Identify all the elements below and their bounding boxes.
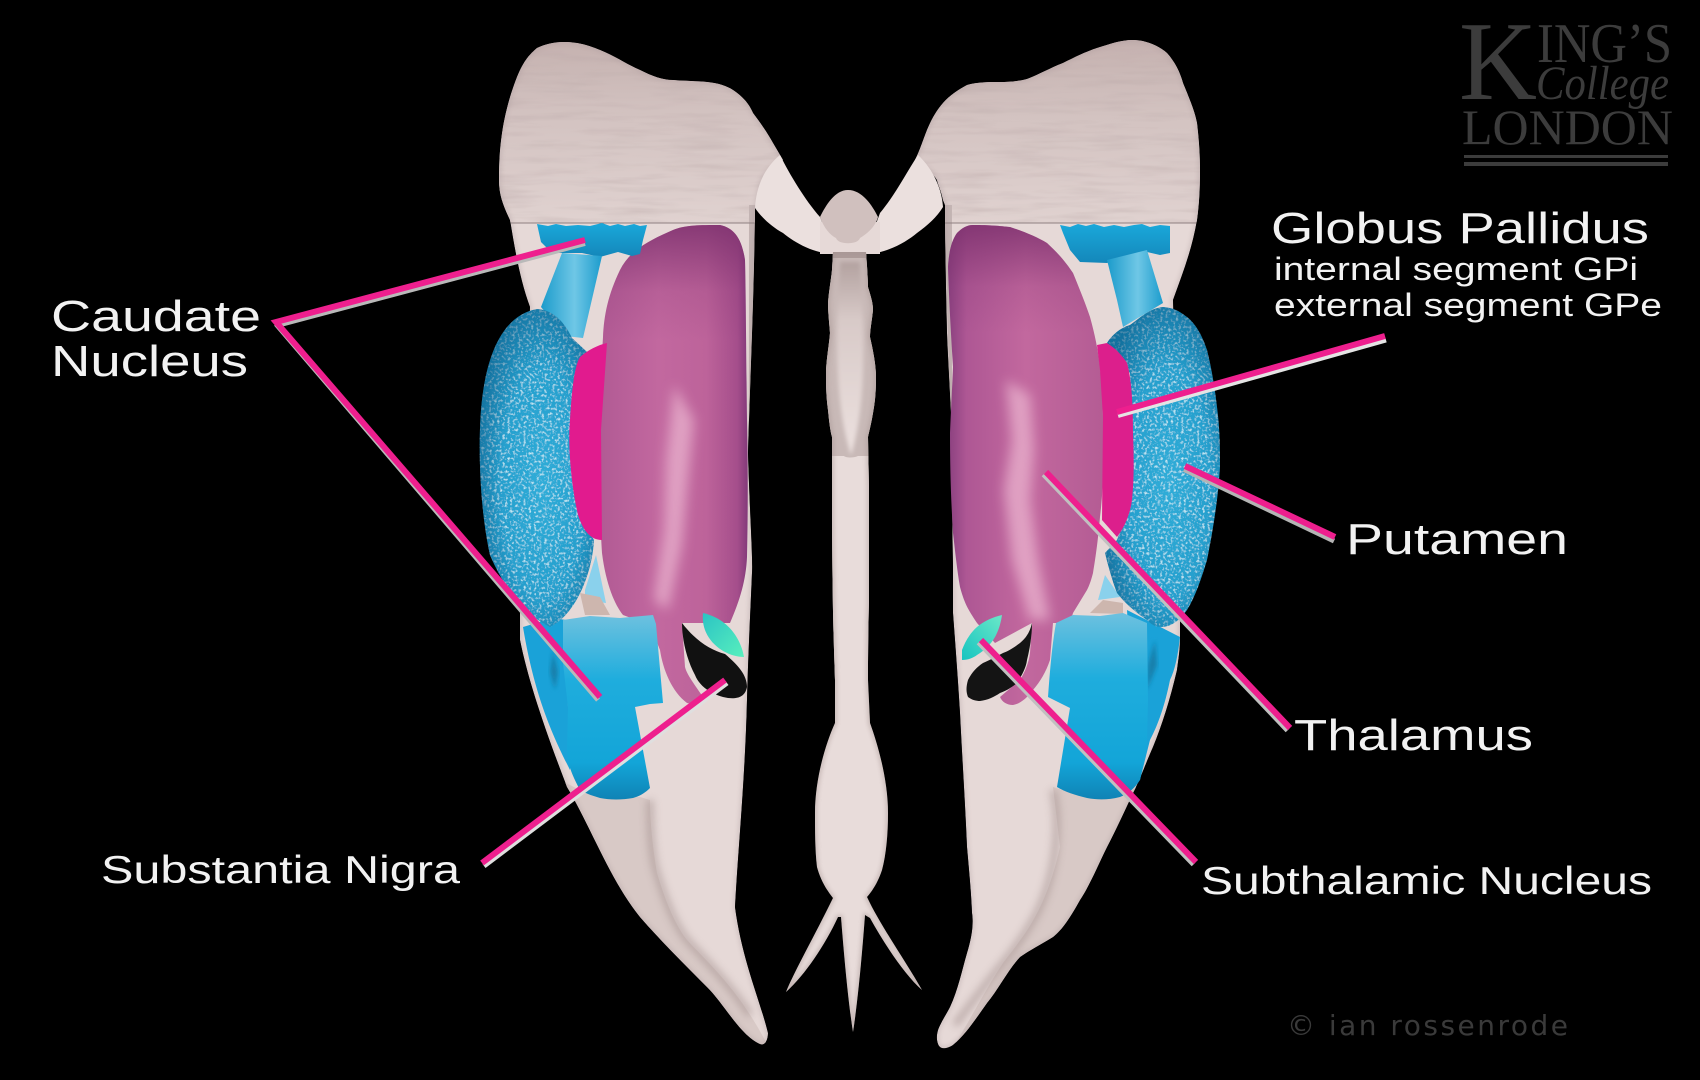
right caudate head — [1060, 224, 1170, 327]
left wing — [755, 155, 835, 254]
line: substantia nigra — [482, 680, 727, 866]
line: putamen — [1184, 466, 1335, 541]
right hemisphere — [910, 30, 1220, 1060]
right brown fold — [1090, 600, 1123, 614]
line: globus pallidus — [1117, 336, 1386, 416]
left hemisphere — [480, 30, 790, 1050]
wing junction — [820, 222, 880, 254]
label: caudate nucleus: Nucleus — [51, 337, 248, 386]
label: putamen: Putamen — [1346, 515, 1568, 564]
right subthalamic nucleus — [962, 615, 1002, 660]
right light blue sliver — [1098, 575, 1120, 600]
left caudate head — [537, 223, 647, 338]
top knob — [820, 190, 878, 243]
right wing — [865, 155, 943, 254]
left outer shell — [490, 30, 790, 1050]
label: subthalamic nucleus: Subthalamic Nucleus — [1201, 860, 1652, 903]
logo: King's College London: ING’S — [1537, 13, 1672, 75]
stem body — [786, 250, 922, 1032]
pointer lines — [276, 240, 1386, 866]
label: external segment: external segment GPe — [1274, 287, 1662, 323]
left brown fold — [580, 593, 610, 615]
logo: King's College London: LONDON — [1462, 99, 1673, 155]
labels — [51, 204, 1662, 903]
logo: King's College London: College — [1536, 57, 1669, 110]
right globus pallidus — [1097, 343, 1134, 537]
right caudate tail — [1048, 610, 1180, 799]
left caudate tail — [523, 615, 663, 800]
left globus pallidus — [569, 343, 607, 540]
line: caudate nucleus — [276, 240, 600, 700]
right thalamus highlight — [1004, 380, 1050, 620]
left caudate neck — [541, 253, 602, 338]
left thalamus — [599, 225, 748, 703]
logo: King's College London: K — [1459, 0, 1537, 124]
label: globus pallidus: Globus Pallidus — [1271, 204, 1649, 253]
right putamen — [1105, 307, 1220, 627]
left substantia nigra — [682, 623, 747, 698]
right caudate neck — [1107, 250, 1163, 327]
logo: King's College London — [1459, 0, 1673, 166]
left thalamus highlight — [654, 385, 694, 610]
label: thalamus: Thalamus — [1294, 711, 1533, 760]
line: thalamus — [1044, 472, 1290, 730]
label: internal segment: internal segment GPi — [1274, 251, 1638, 287]
right substantia nigra — [966, 623, 1032, 701]
right outer shell — [910, 30, 1210, 1060]
line: subthalamic nucleus — [978, 640, 1196, 864]
central brainstem and fork — [755, 155, 943, 1032]
left putamen — [480, 309, 594, 627]
left light blue sliver — [585, 555, 606, 603]
credit: © ian rossenrode — [1287, 1009, 1568, 1042]
label: substantia nigra: Substantia Nigra — [101, 849, 460, 892]
label: caudate nucleus: Caudate — [51, 292, 261, 341]
right thalamus — [948, 225, 1103, 705]
left subthalamic nucleus — [703, 613, 744, 657]
